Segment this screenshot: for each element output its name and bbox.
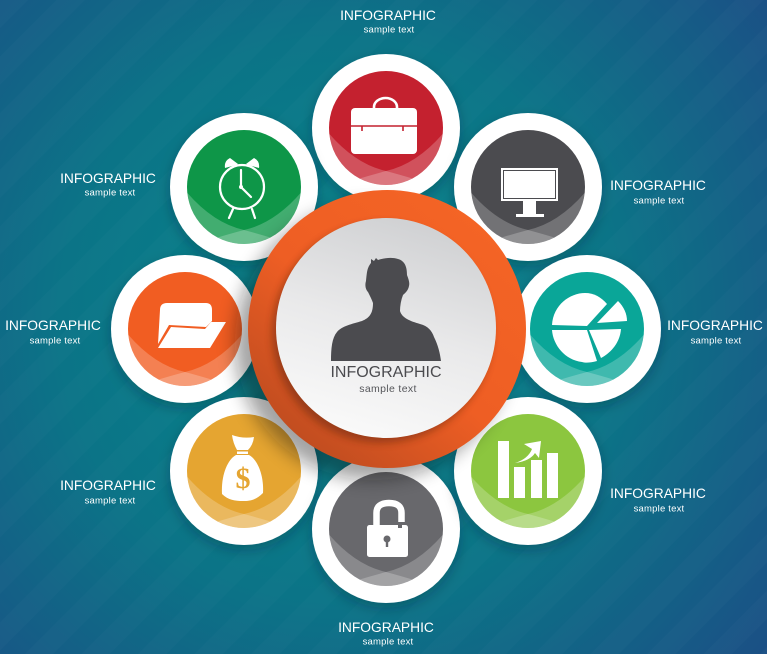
icon: monitor bbox=[501, 168, 558, 217]
central shadow bbox=[235, 204, 511, 480]
icon: pie chart bbox=[552, 293, 627, 363]
central label: INFOGRAPHIC bbox=[330, 364, 442, 381]
satellite: pie chart bbox=[513, 255, 661, 403]
label: upper left: INFOGRAPHIC bbox=[60, 171, 156, 186]
label: upper right: INFOGRAPHIC bbox=[610, 178, 706, 193]
label: right: sample text bbox=[691, 336, 742, 346]
label: lower right: INFOGRAPHIC bbox=[610, 486, 706, 501]
central label bbox=[330, 364, 442, 395]
label: left bbox=[5, 318, 101, 346]
label: right: INFOGRAPHIC bbox=[667, 318, 763, 333]
label: lower right bbox=[610, 486, 706, 514]
satellite: clock bbox=[170, 113, 318, 261]
label: upper right bbox=[610, 178, 706, 206]
label: upper right: sample text bbox=[634, 196, 685, 206]
label: upper left: sample text bbox=[85, 188, 136, 198]
icon: alarm clock bbox=[220, 158, 264, 218]
satellite: folder bbox=[111, 255, 259, 403]
icon: money bag bbox=[222, 435, 263, 501]
central plate bbox=[276, 218, 496, 438]
icon: person silhouette bbox=[331, 258, 441, 361]
icon: folder bbox=[158, 303, 226, 348]
label: top: INFOGRAPHIC bbox=[340, 8, 436, 23]
label: top: sample text bbox=[364, 24, 415, 36]
icon: bar chart with arrow bbox=[498, 441, 558, 498]
satellite: briefcase bbox=[312, 54, 460, 202]
satellite: money bag bbox=[170, 397, 318, 545]
plate shadow bbox=[272, 223, 492, 443]
satellite: monitor bbox=[454, 113, 602, 261]
label: lower right: sample text bbox=[634, 504, 685, 514]
satellite: growth chart bbox=[454, 397, 602, 545]
label: upper left bbox=[60, 171, 156, 198]
central orange ring bbox=[248, 190, 526, 468]
label: top bbox=[340, 8, 436, 36]
label: lower left bbox=[60, 478, 156, 506]
icon: briefcase bbox=[351, 98, 417, 154]
label: right bbox=[667, 318, 763, 346]
label: bottom: INFOGRAPHIC bbox=[338, 620, 434, 635]
label: lower left: sample text bbox=[85, 496, 136, 506]
central label: sample text bbox=[359, 383, 417, 395]
label: bottom bbox=[338, 620, 434, 648]
icon: open padlock bbox=[367, 503, 408, 557]
label: left: INFOGRAPHIC bbox=[5, 318, 101, 333]
satellite: lock bbox=[312, 455, 460, 603]
icon: money bag: $ bbox=[236, 462, 250, 495]
label: bottom: sample text bbox=[363, 636, 414, 648]
label: lower left: INFOGRAPHIC bbox=[60, 478, 156, 493]
label: left: sample text bbox=[30, 336, 81, 346]
